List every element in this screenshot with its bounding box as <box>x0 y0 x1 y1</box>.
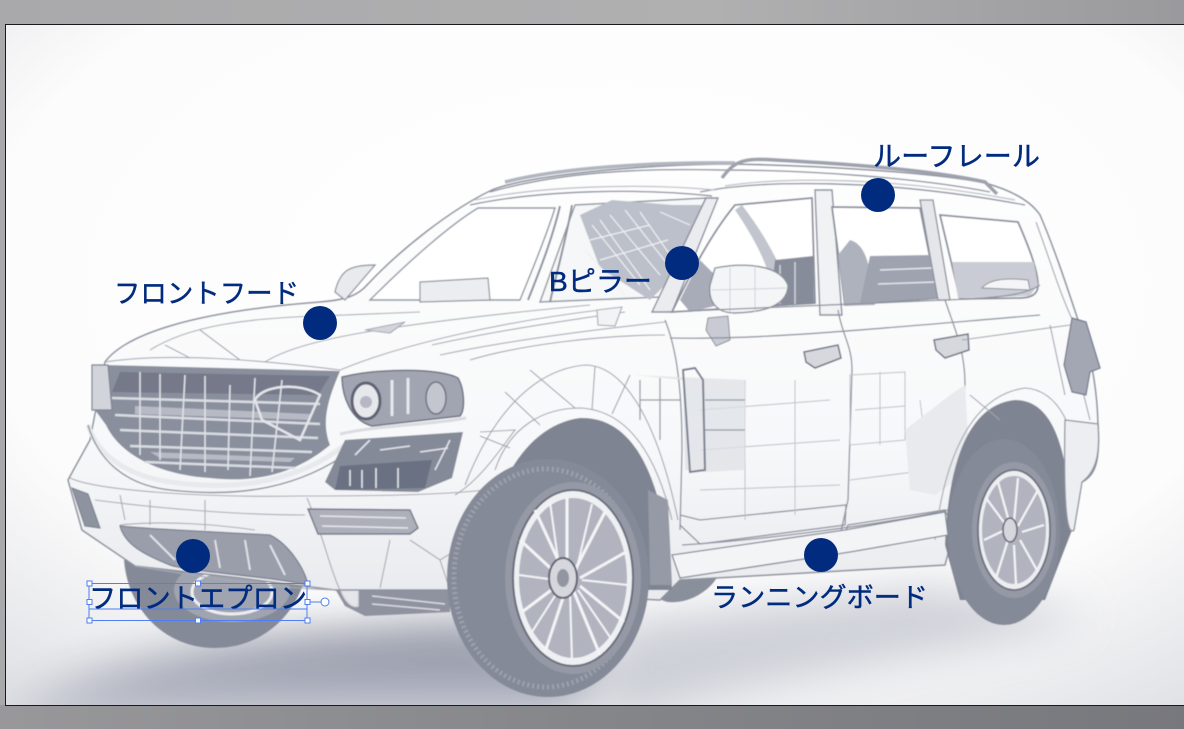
C pillar <box>920 200 950 300</box>
label: front hood: フロントフード <box>114 279 299 309</box>
front fender lines <box>465 335 678 520</box>
front bumper lines <box>70 430 515 590</box>
marker: front hood <box>303 306 337 340</box>
fog lamp <box>308 509 418 534</box>
door lines <box>665 285 1040 575</box>
grille <box>88 365 352 493</box>
rear bumper <box>1065 420 1099 531</box>
B pillar <box>815 190 842 315</box>
marker: B pillar <box>665 246 699 280</box>
rear wheel <box>948 439 1060 625</box>
side mirror <box>706 265 788 346</box>
front corner lamp <box>72 488 100 528</box>
windshield <box>335 198 706 302</box>
rear door window <box>832 207 938 306</box>
front door reinforcement panel <box>635 368 746 472</box>
door handles <box>804 334 969 368</box>
rear wheel arch <box>945 400 1072 600</box>
ground shadow <box>2 585 1090 726</box>
car illustration <box>68 159 1100 697</box>
marker: roof rail <box>861 178 895 212</box>
front wheel arch <box>478 418 672 590</box>
quarter window <box>940 215 1038 299</box>
front side window <box>672 198 815 312</box>
tail light <box>1064 318 1100 395</box>
car body <box>68 164 1098 600</box>
roof and roof rail <box>470 159 1025 205</box>
side step <box>672 512 948 578</box>
far front wheel <box>124 558 307 648</box>
engine bay <box>325 432 463 492</box>
label: running board: ランニングボード <box>711 583 928 613</box>
rear fender lines <box>935 222 1090 540</box>
label: roof rail: ルーフレール <box>873 141 1040 172</box>
label: front apron: フロントエプロン <box>89 583 307 614</box>
far rear wheel <box>650 572 720 602</box>
headlight <box>340 370 466 434</box>
underbody <box>330 580 450 616</box>
lower apron intake <box>120 526 308 585</box>
A pillar <box>652 198 718 312</box>
hood panel lines <box>105 305 665 370</box>
marker: running board <box>804 538 838 572</box>
label: B pillar: Bピラー <box>549 266 652 297</box>
marker: front apron <box>176 539 210 573</box>
door interior structure <box>700 372 930 520</box>
front wheel <box>447 459 649 697</box>
text selection handles <box>87 581 329 623</box>
rear door shaded panel <box>905 385 970 495</box>
